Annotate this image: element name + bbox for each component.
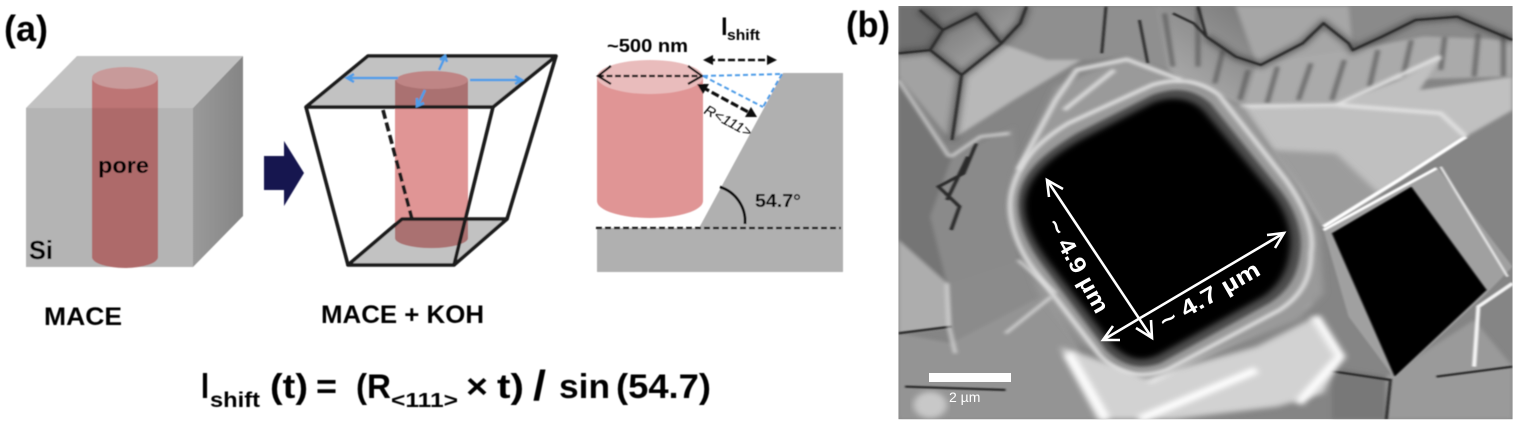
wireframe edges [306, 56, 556, 265]
SEM slab highlight [1324, 137, 1466, 227]
formula: / [533, 362, 546, 409]
pink cylinder [395, 80, 468, 248]
formula: (54.7) [616, 368, 711, 406]
SEM left pit rim [1010, 58, 1324, 380]
SEM rim top band [1018, 59, 1181, 170]
cylinder top ellipse [396, 71, 468, 89]
top face [306, 56, 556, 107]
label: l shift [721, 14, 760, 44]
panel label: (a): (a) [4, 8, 48, 49]
baseline dashed [596, 227, 841, 229]
SEM bright ridge slab right [1240, 57, 1513, 227]
SEM surface cells [898, 6, 1513, 419]
formula: I [201, 365, 209, 406]
formula: = [316, 368, 337, 406]
caption: MACE + KOH: MACE + KOH [321, 301, 484, 329]
SEM bright lower band [1060, 317, 1340, 419]
label: 54.7 degrees: 54.7° [755, 191, 801, 211]
bottom face [348, 219, 507, 265]
label: Si: Si [29, 235, 53, 265]
l_shift arrow [703, 55, 777, 65]
measurement arrow: 4.9 um [1047, 180, 1152, 338]
scale bar [929, 373, 1011, 382]
label: l shift: l [721, 14, 728, 41]
cube top face [26, 56, 243, 108]
formula [201, 362, 711, 412]
SEM stripes [1165, 7, 1503, 103]
cube side face [193, 56, 243, 267]
label: ~500 nm: ~500 nm [607, 36, 688, 56]
label: R<111>: R<111> [702, 102, 755, 140]
SEM background [898, 6, 1513, 419]
formula: <111> [391, 390, 458, 412]
formula: (R [356, 368, 391, 406]
angle arc [720, 187, 745, 224]
pink cylinder [597, 60, 703, 218]
formula: sin [559, 368, 610, 406]
diameter arrow [598, 66, 702, 84]
panel: MACE silicon cube with pore [26, 56, 243, 268]
panel: MACE + KOH etched frustum [306, 56, 556, 265]
measurement arrow: 4.7 um [1103, 233, 1284, 340]
scale bar label: 2 µm [949, 389, 980, 405]
cube front face [26, 108, 193, 267]
SEM rough texture left [939, 143, 976, 230]
label: l shift: shift [727, 27, 760, 44]
grey silicon wedge [597, 73, 843, 272]
R<111> arrow [697, 84, 757, 117]
arrow: process direction [264, 141, 304, 206]
pore cylinder [92, 67, 158, 268]
formula: × [466, 368, 488, 406]
SEM main pit [1010, 81, 1312, 375]
blue dashed triangle [703, 74, 782, 107]
SEM bottom left speck [913, 392, 947, 418]
panel: SEM micrograph [898, 6, 1513, 419]
label: pore: pore [98, 153, 149, 178]
blue etch arrows [347, 56, 522, 106]
formula: (t) [270, 368, 308, 406]
caption: MACE: MACE [44, 303, 122, 331]
SEM dark cracks [898, 7, 1513, 419]
formula: t) [497, 368, 524, 406]
panel: sidewall geometry schematic [596, 14, 843, 272]
formula: shift [210, 389, 260, 412]
label: ~ 4.7 um: ~ 4.7 µm [1154, 256, 1264, 334]
panel label: (b): (b) [846, 4, 890, 45]
SEM crack halos [898, 7, 1513, 140]
SEM second pit [1324, 167, 1513, 378]
label: ~ 4.9 um: ~ 4.9 µm [1042, 214, 1115, 317]
SEM left white ridge [898, 80, 1056, 353]
